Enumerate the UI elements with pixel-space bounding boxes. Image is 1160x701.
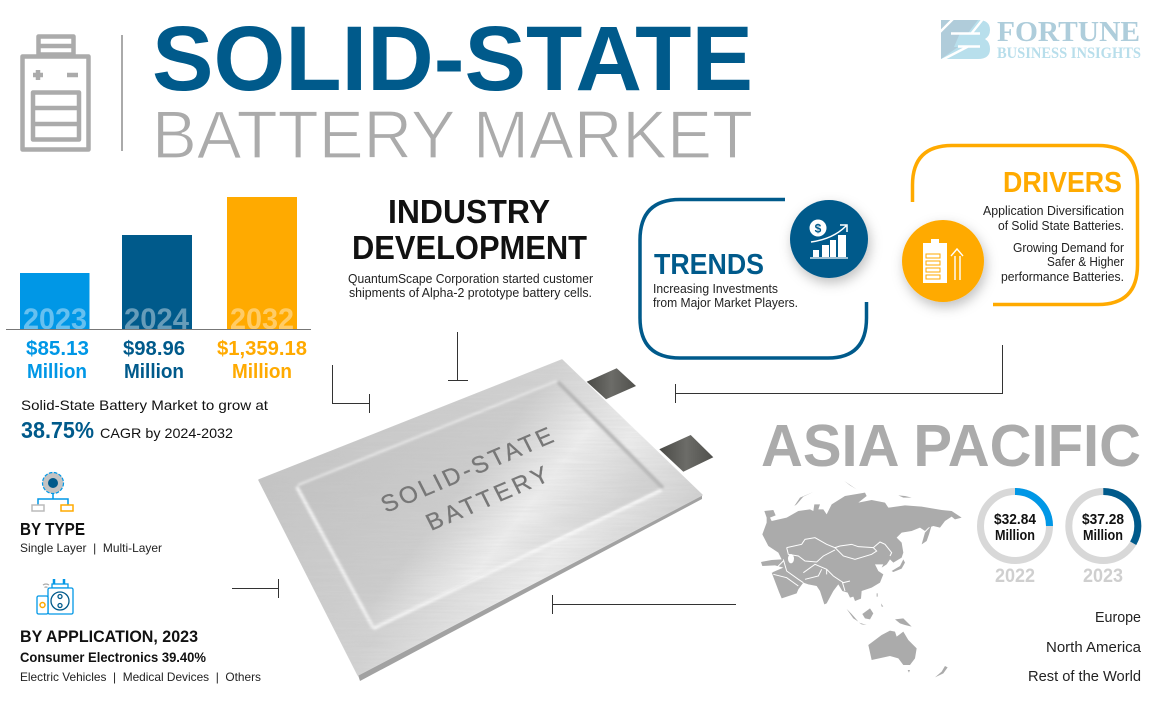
logo: Fortune Business Insights xyxy=(940,16,1141,62)
header divider xyxy=(121,35,123,151)
connector lines xyxy=(232,332,1002,614)
battery label: BATTERY xyxy=(422,462,553,536)
battery illustration xyxy=(259,360,713,681)
bar chart: market size: $1,359.18 xyxy=(217,338,307,360)
bar chart: market size: 2032 xyxy=(230,303,294,336)
donut: 2022: $32.84 xyxy=(994,511,1037,528)
bar chart: market size: 2023 xyxy=(23,303,87,336)
title xyxy=(152,8,753,173)
donut: 2023: 2023 xyxy=(1083,566,1123,587)
donut: 2022 xyxy=(980,492,1050,587)
donut: 2023: Million xyxy=(1083,527,1123,544)
icon: investment growth xyxy=(790,200,868,278)
drivers panel: Safer & Higher xyxy=(1047,255,1124,269)
drivers panel: Application Diversification xyxy=(983,204,1124,218)
by application text: Electric Vehicles | Medical Devices | Others xyxy=(20,670,261,684)
trends panel xyxy=(640,200,868,358)
by application text: BY APPLICATION, 2023 xyxy=(20,627,198,646)
logo: Fortune Business Insights: BUSINESS INSIGHTS xyxy=(997,45,1141,62)
logo: Fortune Business Insights: FORTUNE xyxy=(997,16,1140,48)
icon: investment growth: $ xyxy=(815,222,822,236)
drivers panel: performance Batteries. xyxy=(1001,270,1124,284)
other regions list: Europe xyxy=(1095,609,1141,626)
title: SOLID-STATE xyxy=(152,8,753,110)
industry development: INDUSTRY xyxy=(388,193,550,230)
bar chart: market size xyxy=(6,197,311,383)
CAGR callout xyxy=(21,397,268,443)
industry development: DEVELOPMENT xyxy=(352,229,587,266)
icon: battery demand xyxy=(902,220,984,302)
drivers panel: Growing Demand for xyxy=(1013,241,1124,255)
by type text: Single Layer | Multi-Layer xyxy=(20,541,162,555)
donut: 2023 xyxy=(1069,492,1138,587)
asia pacific heading: ASIA PACIFIC xyxy=(761,413,1141,479)
donut: 2022: 2022 xyxy=(995,566,1035,587)
map: Asia Pacific xyxy=(761,481,962,677)
other regions list: North America xyxy=(1046,639,1142,656)
industry development: QuantumScape Corporation started customer xyxy=(348,271,594,286)
drivers panel: of Solid State Batteries. xyxy=(998,219,1124,233)
trends panel: Increasing Investments xyxy=(653,282,778,296)
bar chart: market size: Million xyxy=(124,361,184,383)
icon: consumer electronics xyxy=(37,579,73,614)
trends panel: TRENDS xyxy=(654,249,764,281)
battery tabs xyxy=(587,368,713,472)
by type text xyxy=(20,519,162,555)
drivers panel xyxy=(902,146,1138,304)
industry development: shipments of Alpha-2 prototype battery cells. xyxy=(349,285,592,300)
bar chart: market size: $85.13 xyxy=(26,338,89,360)
CAGR callout: 38.75% xyxy=(21,417,94,443)
icon: battery xyxy=(22,36,88,150)
other regions list xyxy=(1028,609,1142,685)
donut: 2022: Million xyxy=(995,527,1035,544)
drivers panel: DRIVERS xyxy=(1003,167,1122,199)
trends panel: from Major Market Players. xyxy=(653,296,798,310)
bar chart: market size: Million xyxy=(232,361,292,383)
by application text: Consumer Electronics 39.40% xyxy=(20,649,207,665)
by type text: BY TYPE xyxy=(20,519,85,539)
battery label: SOLID-STATE xyxy=(377,423,558,518)
bar chart: market size: 2024 xyxy=(124,303,189,336)
CAGR callout: Solid-State Battery Market to grow at xyxy=(21,397,268,413)
title: BATTERY MARKET xyxy=(152,97,753,173)
bar chart: market size: $98.96 xyxy=(123,338,185,360)
industry development xyxy=(348,193,594,300)
donut: 2023: $37.28 xyxy=(1082,511,1124,528)
CAGR callout: CAGR by 2024-2032 xyxy=(100,425,233,441)
by application text xyxy=(20,627,261,684)
other regions list: Rest of the World xyxy=(1028,668,1141,685)
icon: segment by type xyxy=(32,472,73,511)
bar chart: market size: Million xyxy=(27,361,87,383)
